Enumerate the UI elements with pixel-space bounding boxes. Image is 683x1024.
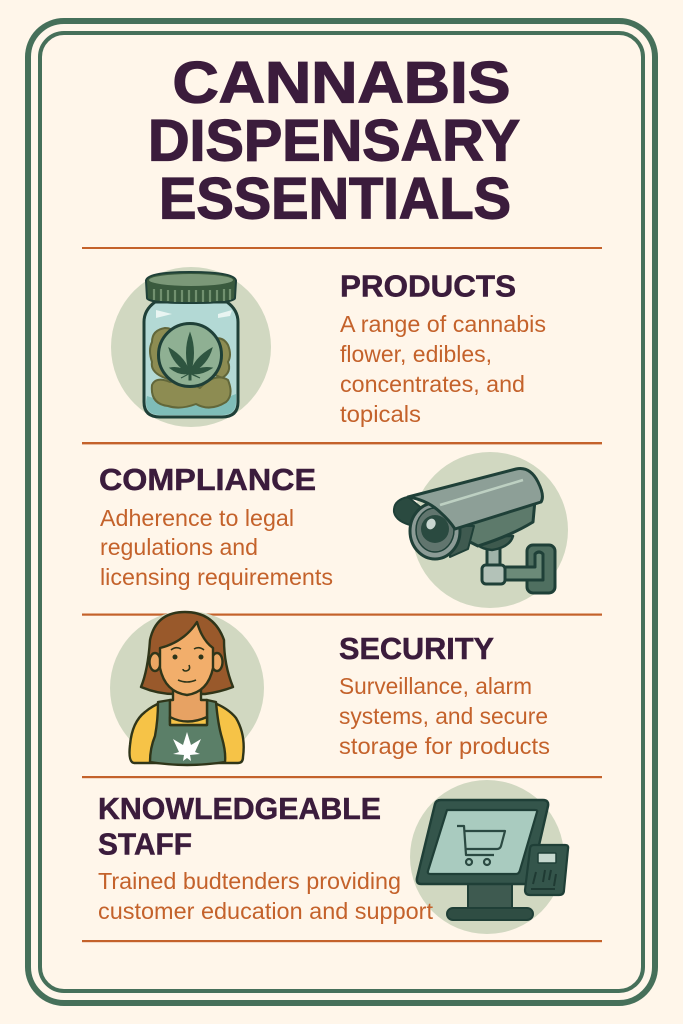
medallion bbox=[158, 324, 222, 386]
section: compliance: Adherence to legal bbox=[100, 505, 294, 531]
icon: cannabis jar bbox=[111, 267, 271, 427]
section: knowledgeable staff: KNOWLEDGEABLE bbox=[98, 791, 381, 826]
section: security: storage for products bbox=[339, 733, 550, 759]
hair bbox=[141, 612, 233, 694]
section: knowledgeable staff: STAFF bbox=[98, 826, 192, 862]
neck bbox=[170, 690, 207, 722]
title: CANNABIS bbox=[172, 50, 511, 116]
section: products bbox=[340, 268, 546, 427]
section: products: concentrates, and bbox=[340, 371, 525, 397]
icon: security camera bbox=[394, 452, 568, 608]
section: products: topicals bbox=[340, 401, 421, 427]
section: security: systems, and secure bbox=[339, 703, 548, 729]
title: ESSENTIALS bbox=[159, 166, 511, 232]
section: knowledgeable staff: Trained budtenders providing bbox=[98, 868, 401, 894]
cart bbox=[457, 826, 505, 865]
shirt bbox=[130, 702, 244, 763]
wall mount bbox=[527, 545, 555, 593]
face bbox=[160, 622, 213, 695]
buds bbox=[150, 328, 231, 408]
screen bbox=[428, 810, 537, 874]
section: compliance: COMPLIANCE bbox=[99, 462, 316, 497]
section: security: Surveillance, alarm bbox=[339, 673, 532, 699]
stand bbox=[468, 884, 512, 909]
lid bbox=[146, 272, 236, 303]
title bbox=[148, 50, 520, 232]
section: security: SECURITY bbox=[339, 631, 494, 666]
leaf bbox=[169, 333, 212, 380]
apron bbox=[150, 700, 225, 765]
section: knowledgeable staff: customer education and support bbox=[98, 898, 434, 924]
ears bbox=[150, 653, 160, 671]
section: knowledgeable staff bbox=[98, 791, 434, 924]
section: security bbox=[339, 631, 550, 759]
card terminal bbox=[525, 845, 568, 895]
camera body bbox=[408, 469, 542, 529]
section: compliance: regulations and bbox=[100, 534, 258, 560]
underside bbox=[478, 536, 513, 550]
icon: POS kiosk bbox=[410, 780, 568, 934]
apron leaf bbox=[173, 732, 201, 761]
title: DISPENSARY bbox=[148, 108, 520, 174]
screen frame bbox=[417, 800, 548, 884]
hood back bbox=[394, 497, 430, 526]
section: products: flower, edibles, bbox=[340, 341, 492, 367]
section: compliance: licensing requirements bbox=[100, 564, 333, 590]
facial features bbox=[171, 648, 204, 682]
lens bbox=[410, 503, 460, 559]
icon: budtender bbox=[110, 611, 264, 765]
section: compliance bbox=[99, 462, 333, 590]
section: products: PRODUCTS bbox=[340, 268, 516, 304]
section: products: A range of cannabis bbox=[340, 311, 546, 337]
